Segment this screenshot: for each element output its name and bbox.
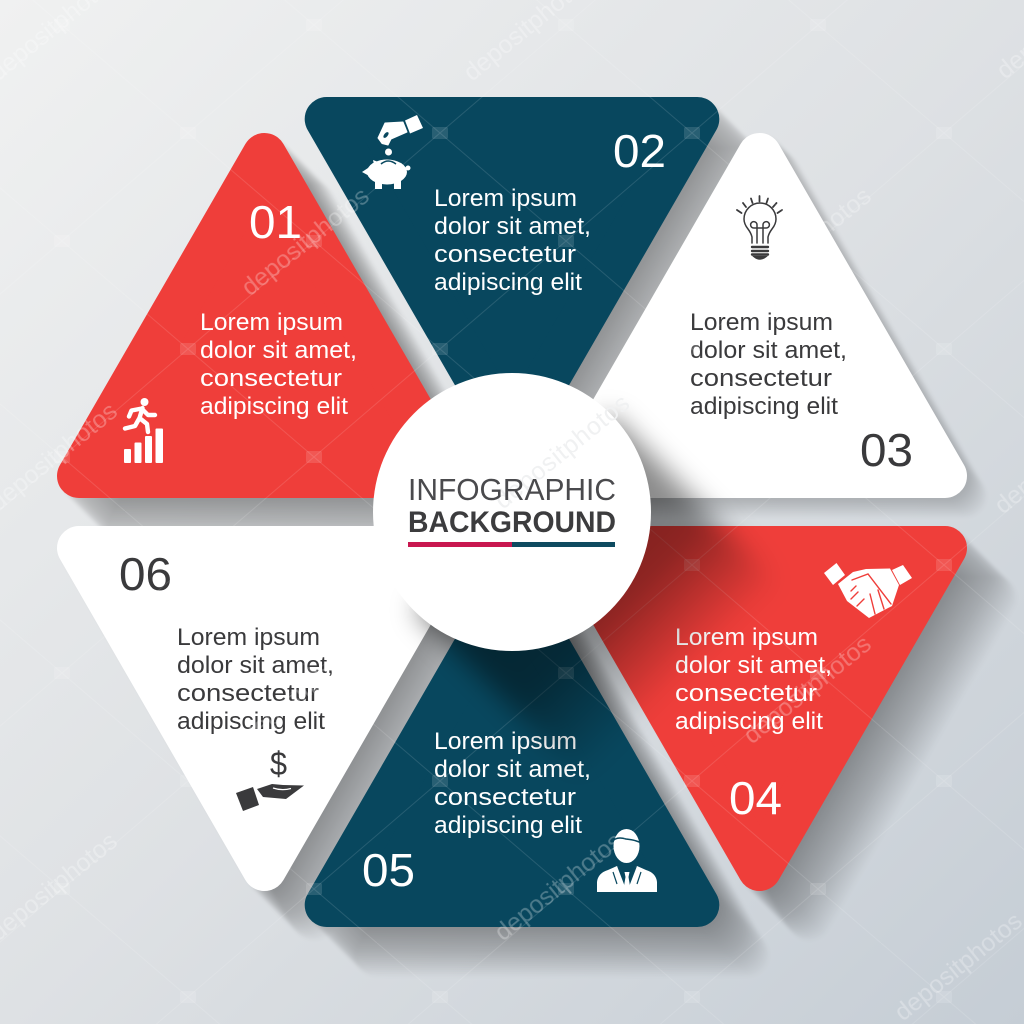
text block 05: Lorem ipsum <box>434 728 577 755</box>
text block 06 <box>177 624 334 735</box>
watermarks: depositphotos <box>236 630 375 750</box>
text block 01: consectetur <box>200 365 342 392</box>
long shadow of centre circle <box>414 414 780 780</box>
text block 06: dolor sit amet, <box>177 652 334 679</box>
watermarks: depositphotos <box>738 182 877 302</box>
text block 03: dolor sit amet, <box>690 337 847 364</box>
text block 06: consectetur <box>177 680 319 707</box>
number 02: 02 <box>613 125 666 177</box>
icon: hand with dollar <box>236 745 304 811</box>
panel: 01 red triangle <box>79 155 450 476</box>
text block 03: adipiscing elit <box>690 393 838 420</box>
text block 02: dolor sit amet, <box>434 213 591 240</box>
text block 01: Lorem ipsum <box>200 309 343 336</box>
title: BACKGROUND <box>408 506 616 539</box>
icon: hand and piggy bank <box>362 115 423 189</box>
text block 03: consectetur <box>690 365 832 392</box>
title underline <box>408 542 615 547</box>
text block 06: Lorem ipsum <box>177 624 320 651</box>
watermarks: depositphotos <box>489 827 628 947</box>
text block 04: dolor sit amet, <box>675 652 832 679</box>
icon: runner climbing bars <box>124 398 163 463</box>
icon: businessman <box>597 829 657 892</box>
text block 04: consectetur <box>675 680 817 707</box>
icon: hand with dollar: $ <box>270 745 287 782</box>
text block 01 <box>200 309 357 420</box>
panel: 03 white triangle <box>574 155 945 476</box>
icon: handshake <box>824 563 912 618</box>
watermark on circle: depositphotos <box>489 389 635 515</box>
text block 04: Lorem ipsum <box>675 624 818 651</box>
text block 01: adipiscing elit <box>200 393 348 420</box>
panel: 06 white triangle <box>79 548 450 869</box>
text block 05 <box>434 728 591 839</box>
text block 02: adipiscing elit <box>434 269 582 296</box>
text block 05: adipiscing elit <box>434 812 582 839</box>
text block 03 <box>690 309 847 420</box>
watermarks: depositphotos <box>738 630 877 750</box>
text block 02 <box>434 185 591 296</box>
panel: 02 navy triangle <box>327 115 697 440</box>
icon: light bulb <box>737 196 782 259</box>
text block 05: consectetur <box>434 784 576 811</box>
text block 03: Lorem ipsum <box>690 309 833 336</box>
title <box>408 472 616 539</box>
number 04: 04 <box>729 772 782 824</box>
number 06: 06 <box>119 548 172 600</box>
number 05: 05 <box>362 844 415 896</box>
long drop shadows of the six triangles <box>81 121 995 955</box>
centre circle <box>373 373 651 651</box>
text block 06: adipiscing elit <box>177 708 325 735</box>
title: INFOGRAPHIC <box>408 472 616 507</box>
number 01: 01 <box>249 196 302 248</box>
text block 04 <box>675 624 832 735</box>
panel: 05 navy triangle <box>327 584 697 905</box>
text block 02: Lorem ipsum <box>434 185 577 212</box>
watermarks: depositphotos <box>236 182 375 302</box>
panel: 04 red triangle <box>574 548 945 869</box>
text block 01: dolor sit amet, <box>200 337 357 364</box>
number 03: 03 <box>860 424 913 476</box>
text block 04: adipiscing elit <box>675 708 823 735</box>
text block 05: dolor sit amet, <box>434 756 591 783</box>
text block 02: consectetur <box>434 241 576 268</box>
